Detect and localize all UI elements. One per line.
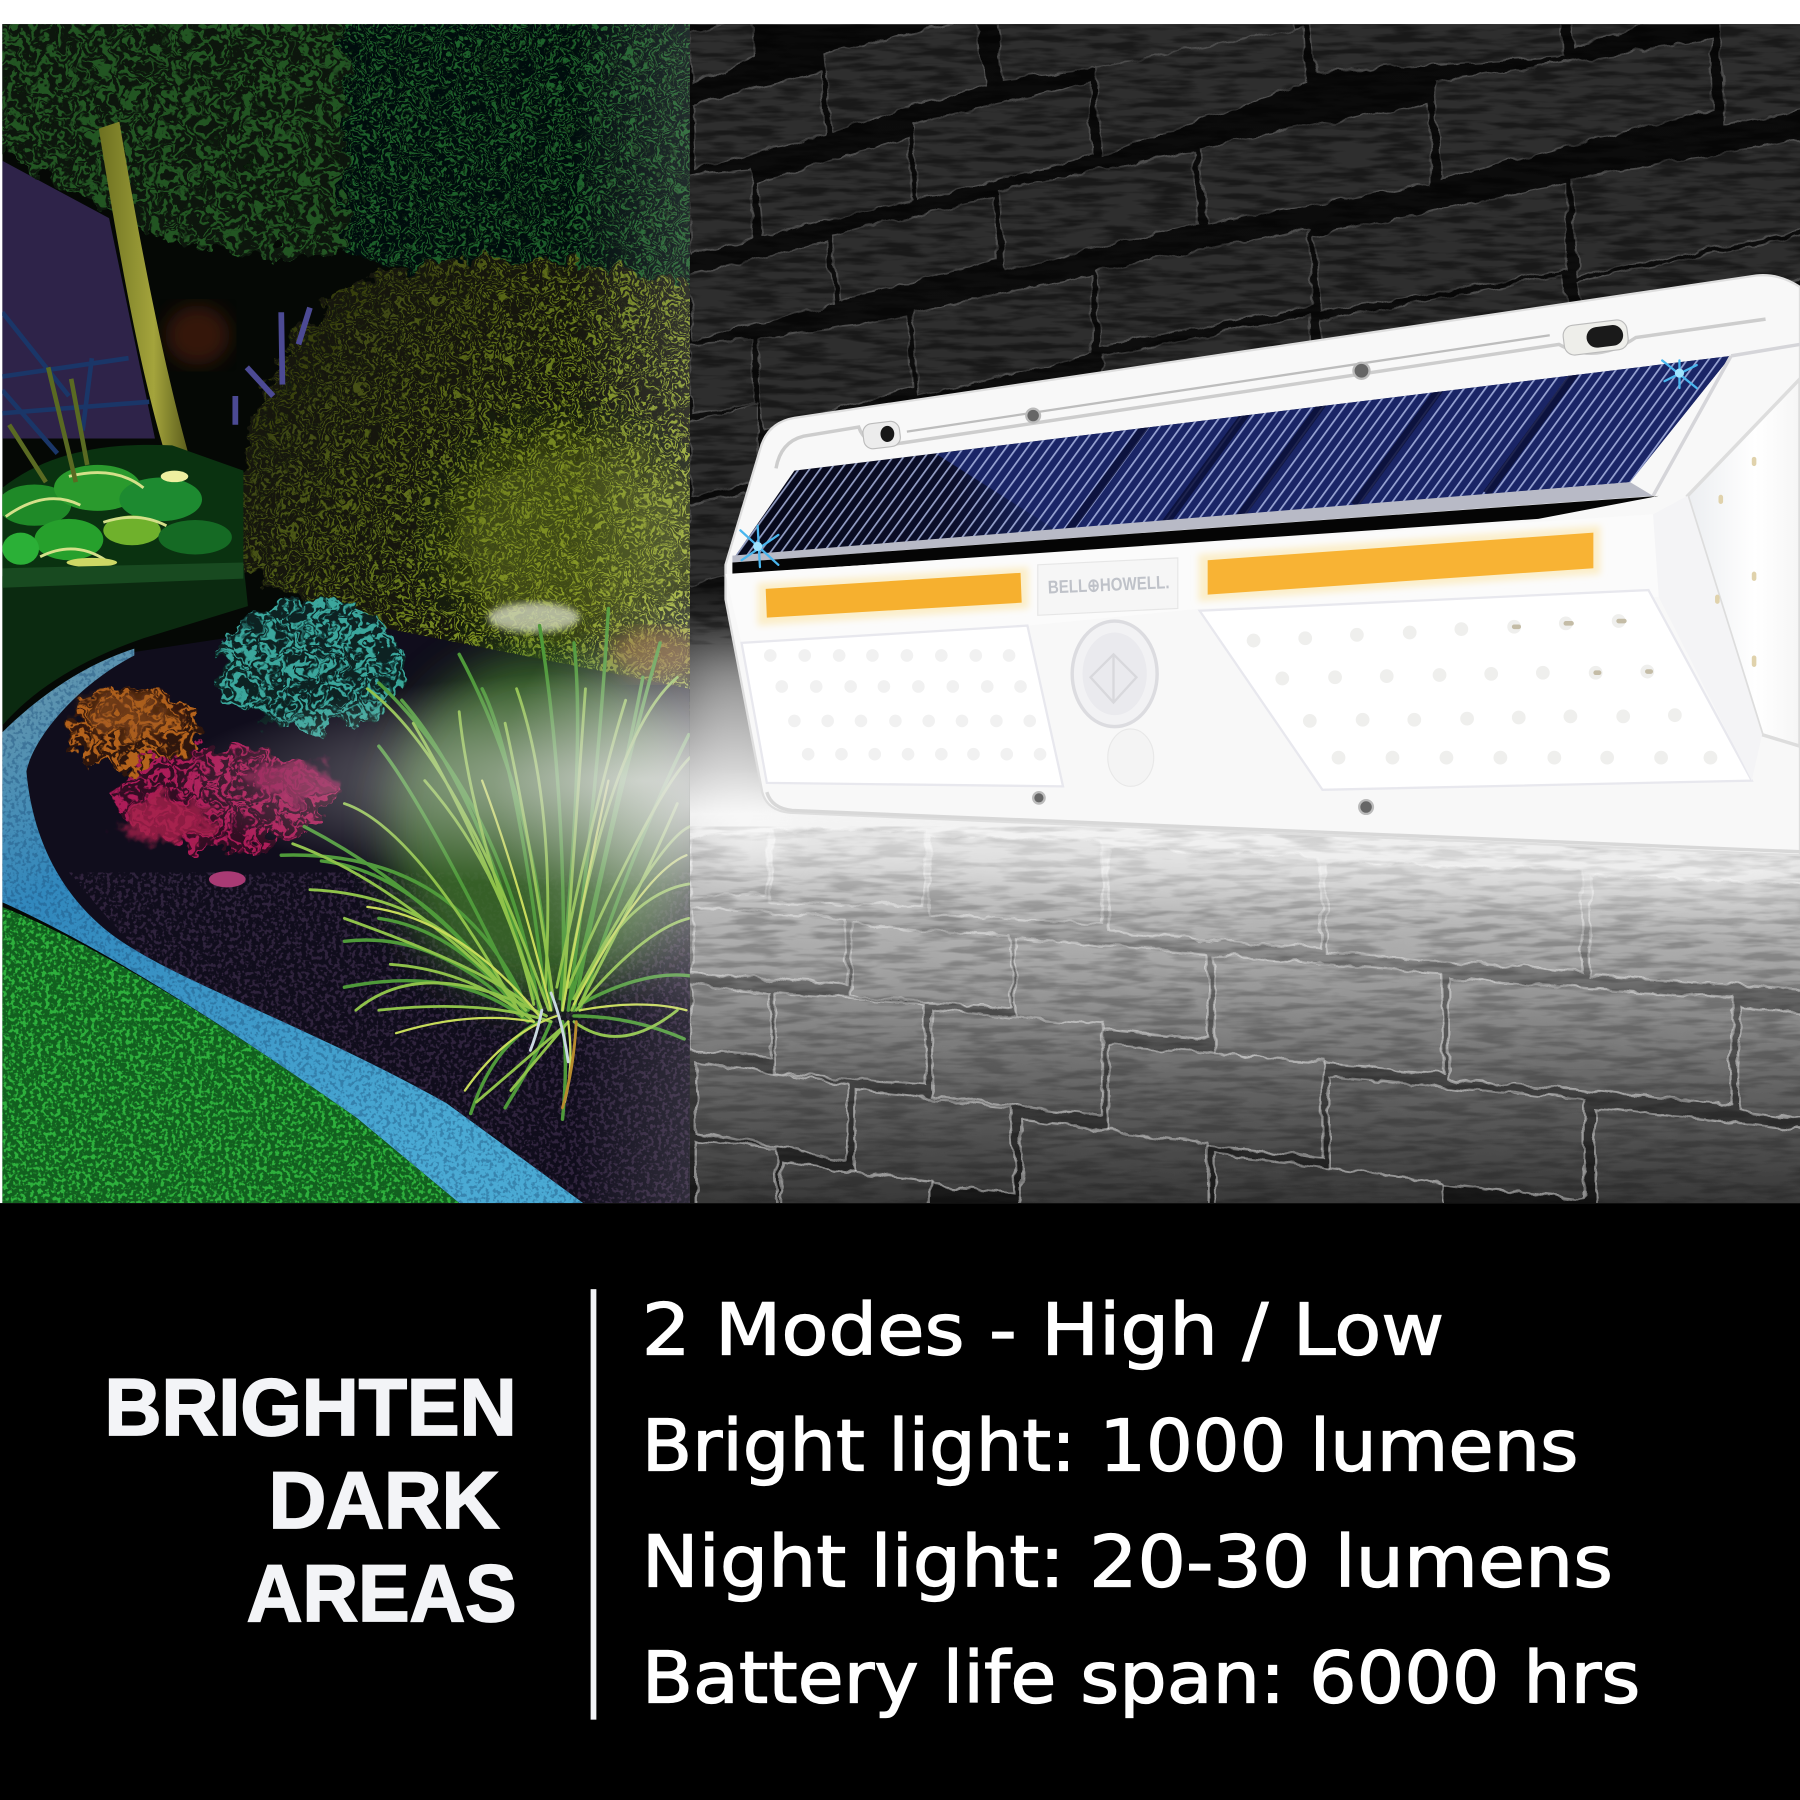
heading: brighten dark areas: BRIGHTEN — [104, 1363, 517, 1453]
red shrub in shadow — [165, 305, 230, 365]
large lit conifer — [235, 258, 712, 712]
feature list: Night light: 20-30 lumens — [642, 1520, 1613, 1603]
cell gaps — [1062, 321, 1613, 540]
light housing — [726, 275, 1800, 855]
feature list: Bright light: 1000 lumens — [642, 1405, 1578, 1488]
blue garden chair — [2, 312, 149, 453]
cell lines — [735, 344, 1733, 562]
brick texture upper — [690, 24, 1800, 644]
power button — [1108, 729, 1154, 786]
orange heuchera — [69, 688, 202, 770]
heading: brighten dark areas: DARK — [269, 1456, 499, 1546]
lawn — [2, 907, 459, 1203]
purple wall behind the tree — [2, 161, 155, 439]
screws — [1026, 363, 1373, 814]
purple flower spikes — [235, 308, 310, 425]
mulch bed — [26, 620, 690, 1203]
side wing — [1653, 344, 1800, 781]
upper dark bricks — [689, 17, 1800, 585]
feature list: Battery life span: 6000 hrs — [642, 1636, 1640, 1719]
white flowers — [488, 603, 580, 633]
solar wall light — [726, 275, 1800, 855]
sparkle: left — [740, 526, 778, 567]
panel: black caption band — [0, 1203, 1800, 1800]
glow under the light — [712, 804, 1800, 907]
pink fallen leaves — [209, 871, 246, 887]
panel: garden photo at night — [2, 24, 690, 1203]
sparkle: right — [1662, 360, 1697, 388]
feature list: 2 Modes - High / Low — [642, 1289, 1444, 1372]
panel: brick wall with solar light — [689, 17, 1800, 1217]
mounting slots — [862, 319, 1629, 450]
left LED panel — [742, 626, 1063, 786]
magenta heuchera — [115, 746, 336, 849]
back plate inset line — [776, 319, 1766, 468]
brick texture lower — [690, 827, 1800, 1203]
heading: brighten dark areas: AREAS — [247, 1549, 517, 1639]
brand badge — [1038, 558, 1178, 615]
hedge — [2, 562, 248, 726]
teal fir — [218, 602, 406, 730]
tree foliage top left — [0, 11, 367, 256]
right LED panel — [1200, 590, 1752, 790]
hosta leaves — [0, 367, 243, 568]
heading: brighten dark areas — [104, 1363, 517, 1639]
solar panel — [732, 321, 1733, 574]
orange ground glow — [608, 629, 700, 680]
brand badge: BELL⊕HOWELL. — [1047, 571, 1170, 597]
lower front face — [726, 514, 1659, 643]
vertical divider — [591, 1289, 596, 1720]
tree trunk — [99, 122, 191, 476]
amber strips — [758, 526, 1600, 626]
lower lit bricks — [691, 829, 1800, 1217]
white light haze — [200, 680, 690, 880]
dark conifer top right — [332, 24, 690, 308]
feature list — [642, 1289, 1640, 1719]
bottom edge — [767, 792, 1800, 852]
ornamental grass clump — [281, 608, 690, 1119]
glass lip and shadow band — [732, 482, 1653, 562]
stone curb — [2, 649, 583, 1203]
motion sensor — [1072, 621, 1157, 727]
